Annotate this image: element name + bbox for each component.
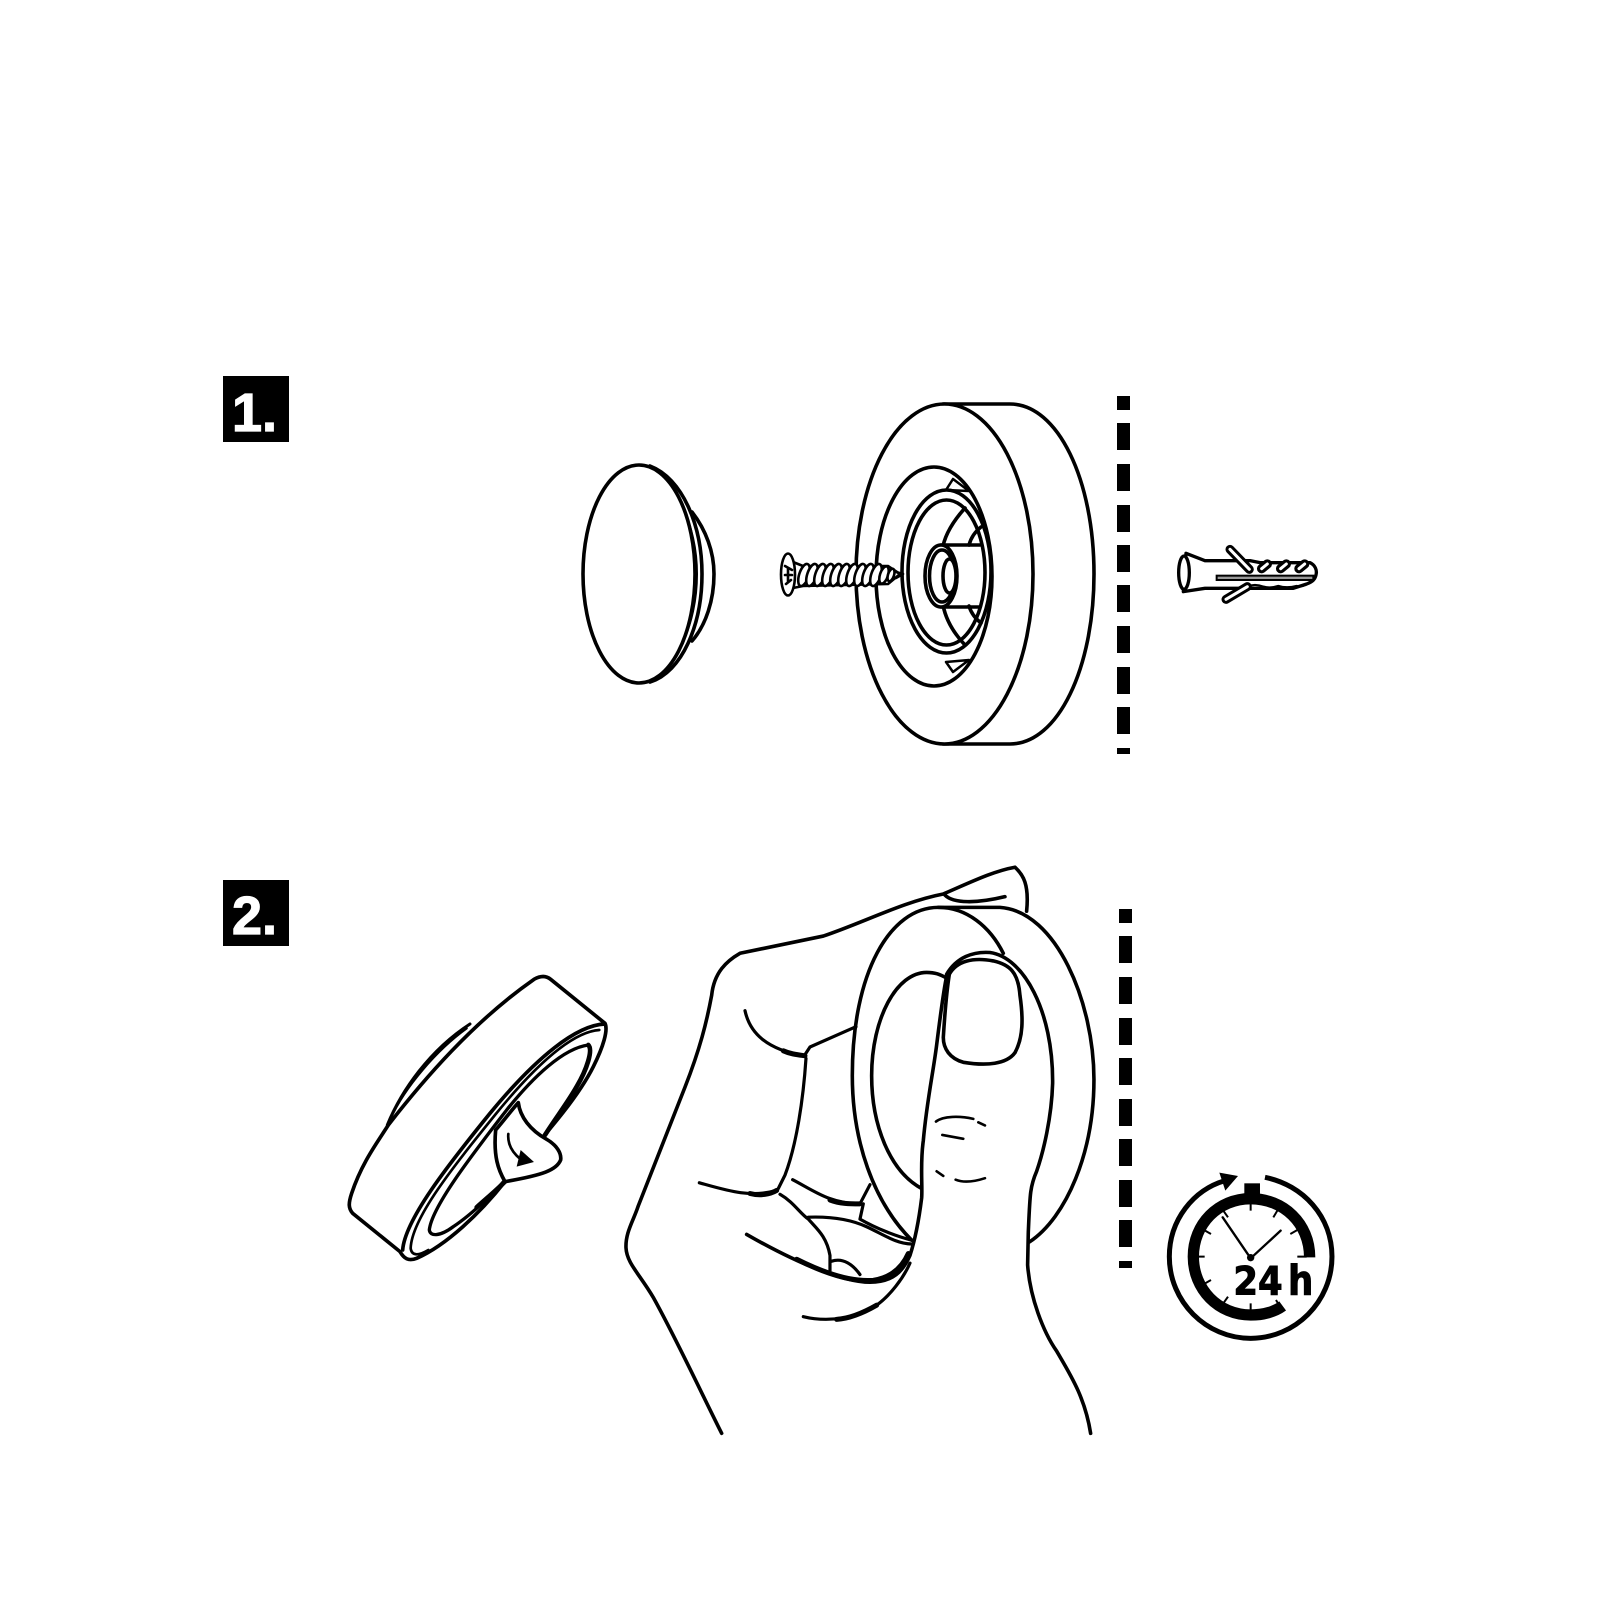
icon: hand pressing ring onto wall: [626, 867, 1094, 1433]
thumbnail: [943, 960, 1022, 1064]
step 2 badge: 2.: [232, 886, 277, 946]
icon: cover cap: [583, 465, 714, 683]
wall line 2 (dashed): [1119, 909, 1132, 1268]
step 2 badge: [223, 880, 289, 946]
icon: ring with adhesive tab: [349, 976, 606, 1260]
dial ring: [1193, 1199, 1310, 1315]
step 1 badge: 1.: [232, 383, 277, 443]
wall line 1 (dashed): [1117, 396, 1130, 754]
step 1 badge: [223, 376, 289, 443]
ring outer edge: [938, 907, 1094, 1242]
ticks: [1197, 1203, 1307, 1311]
icon: screw: [781, 554, 903, 596]
icon: 24 hour timer: h: [1288, 1257, 1313, 1305]
finger creases: [699, 1011, 912, 1319]
outer arrow ring: [1169, 1177, 1332, 1338]
knuckle lines: [936, 1117, 985, 1182]
clock hands: [1223, 1217, 1281, 1258]
icon: 24 hour timer: [1169, 1173, 1332, 1338]
hand outline: [626, 867, 1027, 1433]
icon: wall plug: [1179, 549, 1316, 599]
icon: hook body ring: [856, 404, 1094, 744]
thumb: [747, 976, 947, 1282]
ring front face: [852, 907, 1003, 1240]
24h label: 24: [1233, 1260, 1283, 1305]
